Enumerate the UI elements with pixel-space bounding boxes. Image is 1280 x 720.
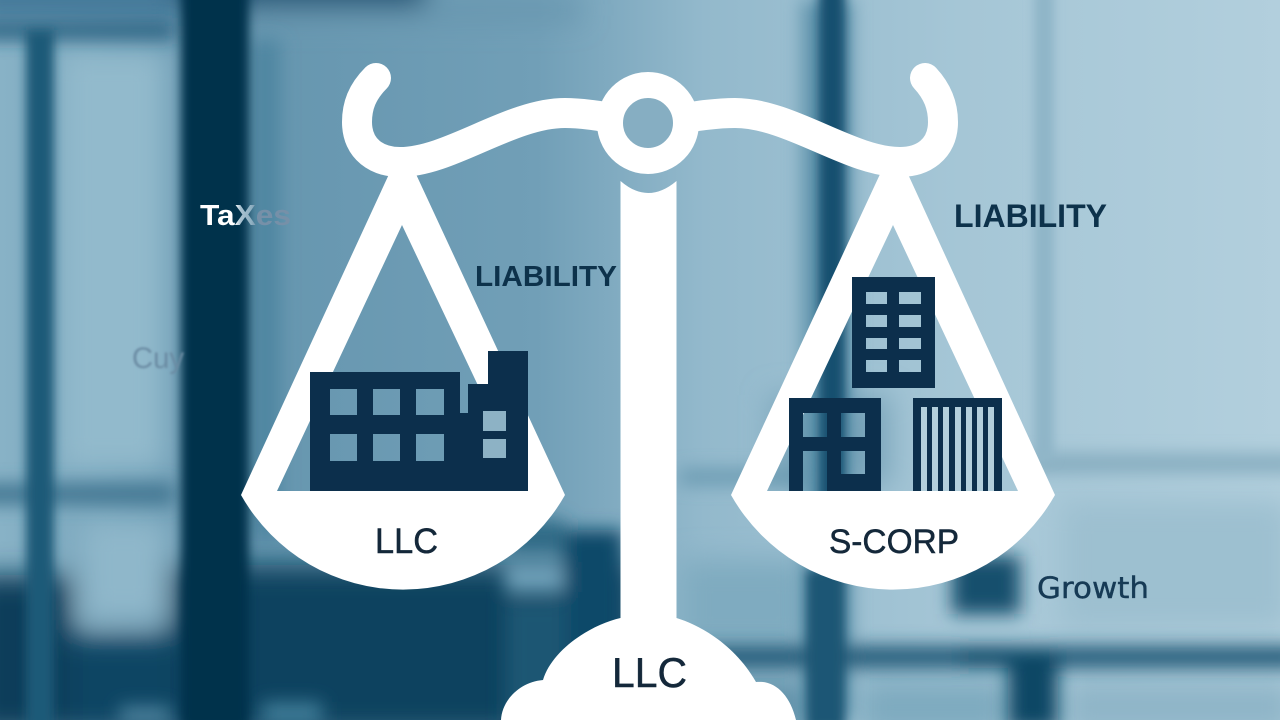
taxes label: TaXes	[200, 200, 291, 232]
pivot ring	[610, 85, 686, 161]
icon: right lower left building	[789, 398, 881, 491]
balance scale	[241, 78, 1055, 720]
liability label left: LIABILITY	[475, 261, 617, 293]
base label: LLC	[612, 649, 687, 696]
liability label right: LIABILITY	[954, 198, 1107, 234]
right pan	[731, 172, 1055, 590]
left pan	[241, 172, 565, 590]
icon: left building	[310, 351, 528, 491]
growth label: Growth	[1037, 571, 1149, 605]
curved beam	[357, 78, 943, 162]
right pan label: S-CORP	[829, 523, 959, 561]
icon: right top building	[852, 277, 935, 388]
left pan label: LLC	[375, 522, 438, 561]
icon: right lower right building	[913, 398, 1002, 491]
faded cost label: Cuy	[132, 342, 184, 375]
column and base	[501, 181, 796, 720]
